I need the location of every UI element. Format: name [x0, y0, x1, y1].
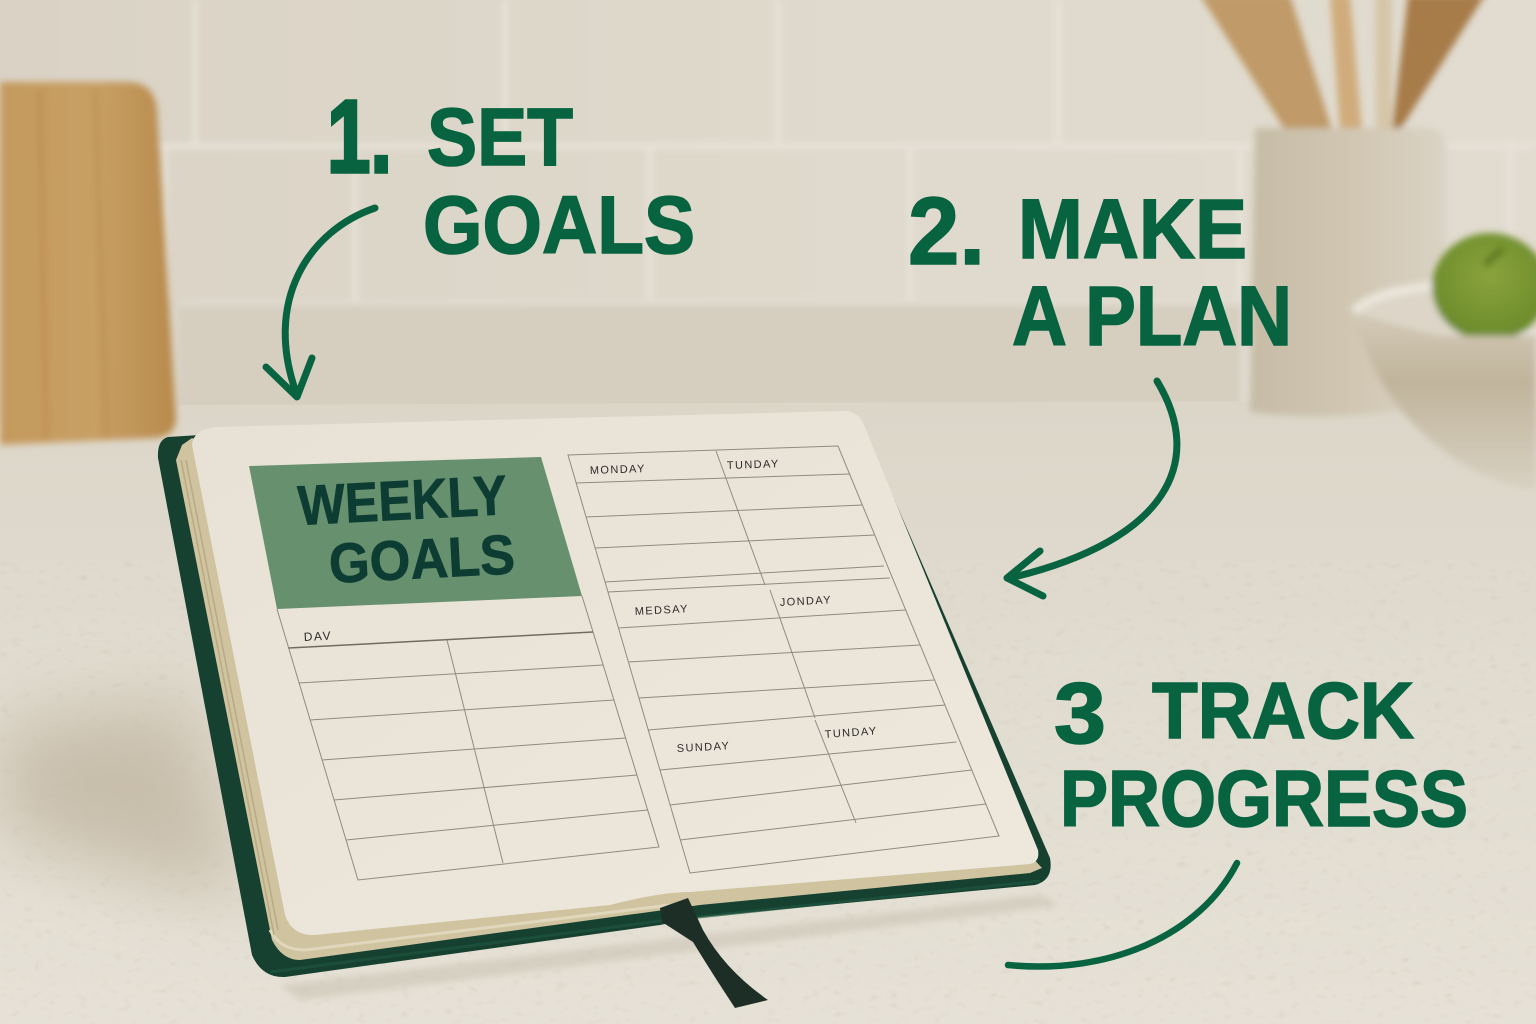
day labels: SUNDAY: [677, 740, 731, 755]
step 2 label: MAKE: [1018, 182, 1247, 276]
counter speckle texture: [0, 560, 1536, 1024]
left page header block: [249, 457, 582, 609]
step 1 label: [327, 79, 695, 271]
step 3 label: TRACK: [1152, 666, 1414, 755]
step 3 label: [1054, 666, 1468, 843]
arrow 2: [1007, 381, 1177, 596]
ribbon bookmark: [660, 898, 768, 1008]
step 2 label: [908, 178, 1292, 363]
step 1 label: 1.: [327, 79, 392, 194]
day labels: MONDAY: [590, 463, 646, 477]
countertop: [0, 400, 1536, 1024]
step 2 label: 2.: [908, 178, 985, 285]
apple: [1432, 233, 1536, 341]
day labels: TUNDAY: [727, 458, 780, 472]
day labels: TUNDAY: [824, 725, 878, 741]
utensil jar: [1200, 0, 1485, 416]
cutting board: [0, 82, 176, 445]
heading: weekly goals: WEEKLY: [296, 463, 508, 537]
left page table: [277, 596, 659, 880]
day labels: JONDAY: [780, 594, 832, 609]
step 2 label: A PLAN: [1012, 269, 1292, 363]
arrow 1: [266, 208, 375, 397]
day labels: MEDSAY: [635, 603, 689, 618]
heading: weekly goals: GOALS: [327, 522, 516, 595]
label: dav: DAV: [303, 629, 332, 644]
open page surface: [192, 411, 1038, 935]
bowl with green apple: [1352, 233, 1536, 490]
step 1 label: GOALS: [423, 180, 695, 271]
step 3 label: PROGRESS: [1060, 754, 1468, 843]
day labels: [590, 458, 878, 755]
tiled wall: [0, 0, 1536, 420]
right page table: [568, 446, 999, 873]
book shadow: [280, 895, 1060, 1000]
counter shadow by the book: [0, 700, 250, 900]
dark green cover: [158, 425, 1051, 977]
arrow 3: [1008, 863, 1237, 967]
heading: weekly goals: [296, 463, 516, 595]
page block edges: [176, 438, 1042, 960]
notebook: [158, 411, 1060, 1008]
step 1 label: SET: [427, 92, 573, 183]
wooden utensils: [1200, 0, 1485, 130]
step 3 label: 3: [1054, 666, 1106, 762]
